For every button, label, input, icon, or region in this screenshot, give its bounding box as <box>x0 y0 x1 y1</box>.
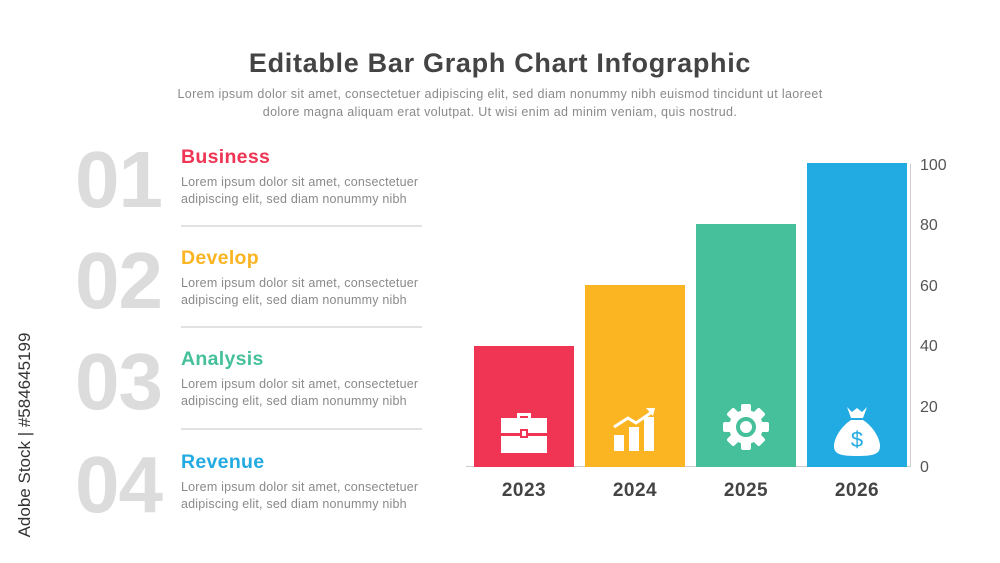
subtitle: Lorem ipsum dolor sit amet, consectetuer adipiscing elit, sed diam nonummy nibh euismod tincidunt ut laoreet <box>177 87 823 101</box>
subtitle <box>177 87 823 119</box>
item 03: Analysis <box>181 348 264 370</box>
item 03 <box>75 337 418 426</box>
item 01: 01 <box>75 135 162 224</box>
watermark id: Adobe Stock | #584645199 <box>15 333 34 537</box>
bar chart: 20 <box>920 399 938 416</box>
item 01: Lorem ipsum dolor sit amet, consectetuer adipiscing elit, sed diam nonummy nibh <box>181 175 418 206</box>
bar chart: 100 <box>920 157 947 174</box>
bar chart <box>466 157 947 476</box>
item 04 <box>75 440 418 529</box>
item 01 <box>75 135 418 224</box>
bar chart: 60 <box>920 278 938 295</box>
item 04: Lorem ipsum dolor sit amet, consectetuer adipiscing elit, sed diam nonummy nibh <box>181 480 418 511</box>
text: 2026 <box>835 480 879 501</box>
bar 2026 <box>807 163 907 467</box>
text: 2024 <box>613 480 657 501</box>
bar 2023 <box>474 346 574 467</box>
text: 2023 <box>502 480 546 501</box>
bar chart: 40 <box>920 338 938 355</box>
text: 2025 <box>724 480 768 501</box>
item 01: Business <box>181 146 270 168</box>
item 04: Revenue <box>181 451 264 473</box>
item 03: Lorem ipsum dolor sit amet, consectetuer adipiscing elit, sed diam nonummy nibh <box>181 377 418 408</box>
title: Editable Bar Graph Chart Infographic <box>249 48 751 78</box>
bar 2026: $ <box>851 427 863 452</box>
item 02: Develop <box>181 247 259 269</box>
item 02: Lorem ipsum dolor sit amet, consectetuer adipiscing elit, sed diam nonummy nibh <box>181 276 418 307</box>
bar chart: 0 <box>920 459 929 476</box>
bar chart: 80 <box>920 217 938 234</box>
bar 2024 <box>585 285 685 467</box>
item 02: 02 <box>75 236 162 325</box>
item 04: 04 <box>75 440 162 529</box>
item 03: 03 <box>75 337 162 426</box>
bar 2025 <box>696 224 796 467</box>
axis ticks <box>920 157 947 476</box>
year labels <box>502 480 879 501</box>
subtitle: dolore magna aliquam erat volutpat. Ut wisi enim ad minim veniam, quis nostrud. <box>263 105 737 119</box>
item 02 <box>75 236 418 325</box>
